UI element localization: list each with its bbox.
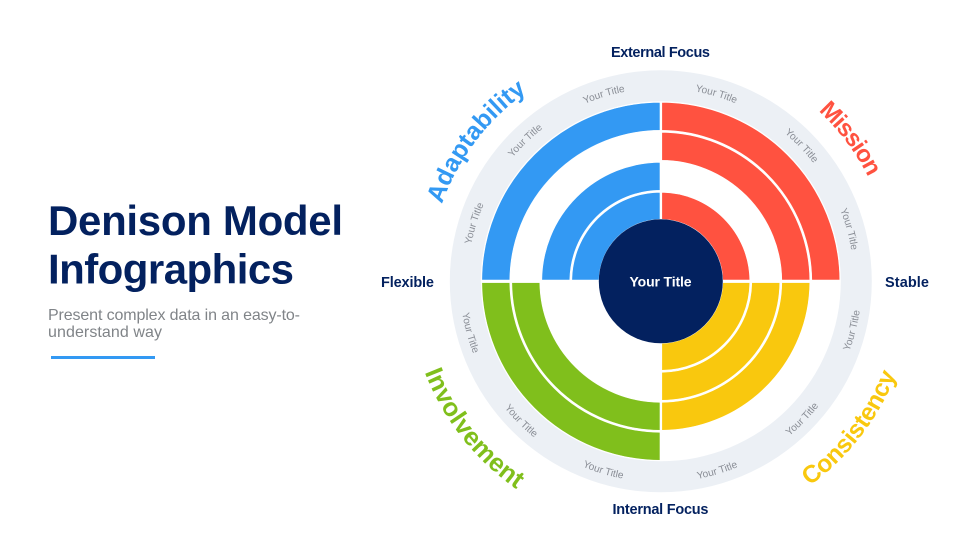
- ring labels: Your Title: [464, 203, 484, 243]
- subtitle: understand way: [48, 324, 162, 341]
- title: [48, 197, 343, 292]
- axis label: Flexible: Flexible: [381, 275, 434, 291]
- axis label: External Focus: External Focus: [611, 45, 710, 61]
- label: Involvement: Involvement: [425, 367, 524, 489]
- subtitle: Present complex data in an easy-to-: [48, 307, 300, 324]
- ring labels: [462, 84, 860, 478]
- subtitle: [48, 307, 300, 341]
- ring labels: Your Title: [842, 310, 860, 349]
- ring labels: Your Title: [506, 404, 536, 437]
- quadrant: adaptability blue: [482, 102, 660, 280]
- label: Consistency: Consistency: [803, 370, 898, 482]
- title: Denison Model: [48, 197, 343, 244]
- chart: Denison quadrants: [482, 102, 840, 460]
- quadrant: involvement green: [482, 283, 660, 460]
- ring labels: Your Title: [841, 208, 858, 250]
- center circle: [599, 219, 723, 343]
- ring labels: Your Title: [696, 84, 736, 103]
- ring labels: Your Title: [462, 312, 478, 353]
- ring labels: Your Title: [786, 128, 817, 162]
- center circle: Your Title: [630, 274, 692, 290]
- ring labels: Your Title: [585, 460, 623, 478]
- ring labels: Your Title: [785, 404, 818, 434]
- title: Infographics: [48, 246, 294, 292]
- quadrant: consistency yellow: [662, 283, 810, 430]
- ring labels: Your Title: [696, 462, 737, 478]
- label: Mission: Mission: [820, 100, 878, 176]
- quadrant: mission red: [662, 102, 840, 280]
- axis label: Stable: Stable: [885, 275, 929, 291]
- ring labels: Your Title: [508, 125, 542, 156]
- label: Adaptability: Adaptability: [428, 81, 524, 204]
- axis label: Internal Focus: Internal Focus: [612, 502, 708, 518]
- ring labels: Your Title: [582, 86, 624, 103]
- accent line: [51, 356, 155, 359]
- gray outer ring: [450, 70, 872, 492]
